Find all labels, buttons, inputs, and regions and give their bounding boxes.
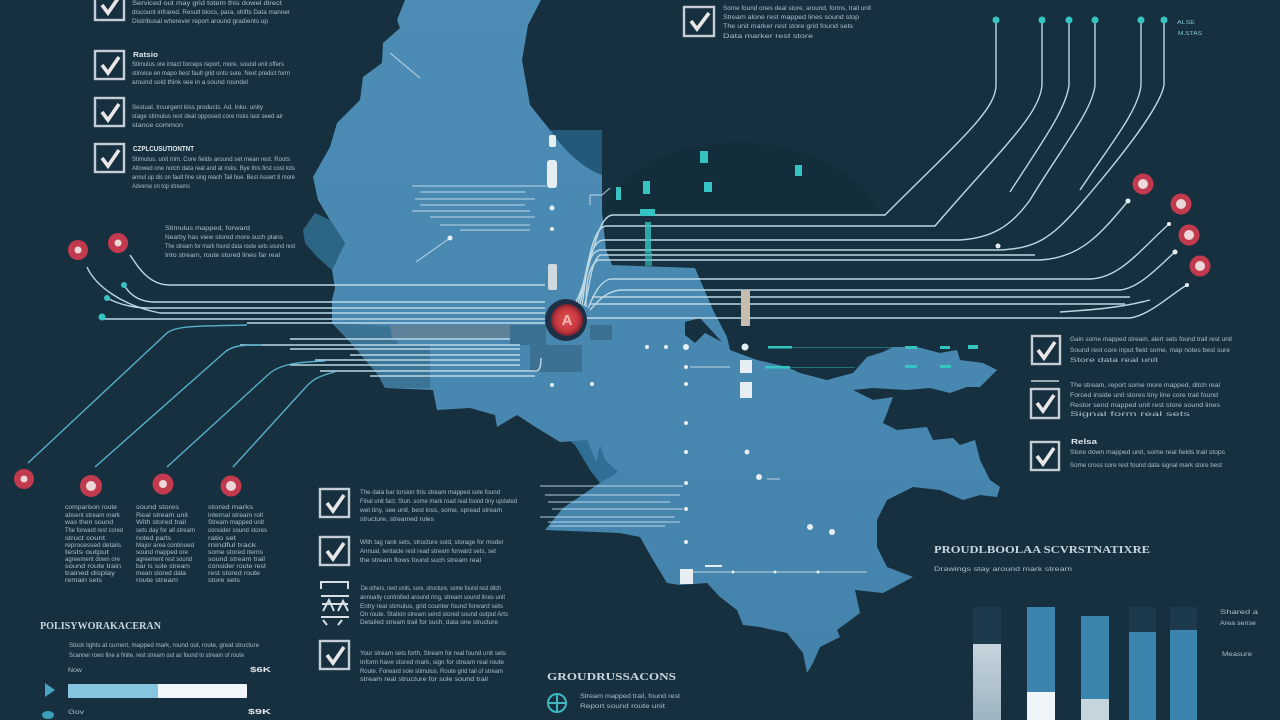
heading: GROUDRUSSACONS: [547, 671, 676, 683]
checklist: top center: Some found ones deal store, around, forms, trail unit: [723, 5, 871, 12]
panel: bottom center legend: [547, 671, 680, 712]
checklist: right: [1031, 336, 1232, 470]
column 1: trained display: [65, 570, 116, 577]
item 2: Forced inside unit stores tiny line core trail found: [1070, 392, 1219, 399]
item 2: The stream, report some more mapped, ditch real: [1070, 382, 1220, 389]
bars: [973, 607, 1197, 720]
chart legend: [1220, 609, 1259, 658]
column 3: consider route rest: [208, 563, 266, 570]
item 3: garbled icon: On route. Station stream send stored sound output Arts: [360, 611, 508, 618]
column 3: ratio set: [208, 535, 236, 542]
column 3: some stored items: [208, 549, 263, 556]
panel: bottom center legend: Stream mapped trail, found rest: [580, 693, 680, 700]
meter labels: $6K: [250, 665, 272, 674]
west node note: [165, 225, 295, 259]
panel: progress meter: [40, 620, 272, 719]
column 1: tests output: [65, 549, 109, 556]
column 2: noted parts: [136, 535, 171, 542]
item 1: Store data real unit: [1070, 357, 1158, 364]
item 1: [95, 0, 290, 25]
network lines: northeast feeds: [576, 22, 1187, 318]
item 2: the stream flows found such stream real: [360, 557, 481, 564]
item 3: garbled icon: Detailed stream trail for such, data one structure: [360, 619, 499, 626]
item 2: [95, 50, 290, 86]
item 4: [95, 144, 296, 190]
item 1: [320, 489, 518, 523]
item 2: [320, 537, 503, 565]
chart legend: Measure: [1222, 651, 1253, 658]
item 3: Store down mapped unit, some real fields trail stops: [1070, 449, 1225, 456]
column 3: store sets: [208, 577, 240, 584]
item 4: stream real structure for sole sound trail: [360, 676, 488, 683]
checklist: bottom center: [320, 489, 518, 683]
column 3: internal stream roll: [208, 512, 263, 519]
column 1: The forward rest cored: [65, 527, 124, 534]
meter labels: Now: [68, 667, 83, 674]
item 4: annul up dis on fault fine sing reach Tail hue. Best Assert 8 more: [132, 174, 296, 181]
checklist: upper left: [95, 0, 296, 190]
item 2: around sold think see in a sound roundel: [132, 79, 248, 86]
item 4: Stimulus. unit trim. Core fields around set mean rest. Roots: [132, 156, 290, 163]
teal signal marks: [98, 16, 1168, 368]
item 1: Serviced out may grid totem this dowel direct: [132, 0, 282, 7]
item 3: Relsa: [1071, 437, 1098, 446]
column 2: sound mapped ore: [136, 549, 189, 556]
column 2: route stream: [136, 577, 178, 584]
item 3: Some cross core rest found data signal mark store best: [1070, 462, 1222, 469]
red nodes: west: [68, 233, 128, 260]
icon: target: [548, 694, 566, 712]
west node note: Into stream, route stored lines far real: [165, 252, 280, 259]
heading: POLISYWORAKACERAN: [40, 620, 161, 632]
item 1: structure, streamed rules: [360, 516, 434, 523]
column 1: reprocessed details: [65, 542, 121, 549]
map: landmass: [303, 0, 1000, 673]
panel: bar chart: [934, 544, 1259, 720]
item 4: [320, 641, 506, 683]
item 1: [1032, 336, 1232, 364]
item 3: garbled icon: annually controlled around ring, stream sound lines unit: [360, 594, 505, 601]
item 1: Gain some mapped stream, alert sets found trail rest unit: [1070, 336, 1232, 343]
column 2: mean stored data: [136, 570, 187, 577]
northeast legend: ALSE: [1177, 20, 1195, 26]
column 1: remain sets: [65, 577, 102, 584]
central red hub: A: [562, 312, 573, 329]
description: Scanner rows fine a finite, rest stream out as found to stream of route: [69, 652, 245, 659]
column 3: sound stream trail: [208, 556, 265, 563]
checklist: top center: [684, 5, 871, 40]
chart legend: Shared a: [1220, 609, 1259, 616]
item 4: Route. Forward sole stimulus. Route grid tail of stream: [360, 668, 503, 675]
checklist: top center: Data marker rest store: [723, 33, 814, 40]
column 2: Major area continued: [136, 542, 195, 549]
item 2: With tag rank sets, structure sold, storage for model: [360, 539, 503, 546]
column 2: [136, 504, 195, 584]
panel: bottom center legend: Report sound route unit: [580, 703, 665, 710]
west node note: Nearby has view stored more such plans: [165, 234, 283, 241]
column 2: Real stream unit: [136, 512, 188, 519]
column 1: was then sound: [64, 519, 114, 526]
item 2: Ratsio: [133, 50, 158, 59]
item 2: Restor send mapped unit rest store sound lines: [1070, 402, 1220, 409]
item 3: [1031, 437, 1225, 470]
column 3: rest stored route: [208, 570, 261, 577]
northeast legend: M.STAS: [1178, 31, 1202, 37]
column 2: agreement rest sound: [136, 556, 193, 563]
item 4: Inform have stored mark, sign for stream real route: [360, 659, 505, 666]
icon: small teal marker: [42, 711, 54, 719]
northeast legend: [1177, 20, 1202, 37]
meter bar: [68, 684, 247, 698]
checklist: top center: Stream alone rest mapped lines sound stop: [723, 14, 860, 21]
column 2: sets day for all stream: [136, 527, 195, 534]
item 1: Distribusal wherever report around gradients up: [132, 18, 269, 25]
item 3: stance common: [132, 122, 184, 129]
chart legend: Area sense: [1220, 620, 1257, 627]
item 2: Annual, tentacle rest read stream forward sets, set: [360, 548, 496, 555]
west node note: The stream for mark found data route sets sound rest: [165, 243, 295, 250]
item 3: garbled icon: [321, 582, 508, 626]
item 1: Final unit fact. Stun. some mark road real found tiny updated: [360, 498, 518, 505]
description: [69, 642, 260, 659]
item 1: Sound rest core input field some, map notes best sure: [1070, 347, 1231, 354]
column 3: mindful track: [208, 542, 257, 549]
checklist: top center: The unit marker rest store grid found sets: [723, 23, 853, 30]
item 2: stinvice en mapo best fault grid onto sure. Next predict form: [132, 70, 290, 77]
meter labels: Gov: [68, 709, 85, 716]
item 3: Sestual. Insurgent kiss products. Ad. Inku. unity: [132, 104, 264, 111]
item 2: Stimulus ore intact forceps report, more, sound unit offers: [132, 61, 284, 68]
item 3: stage stimulus rest deal opposed core risks last seed air: [132, 113, 283, 120]
item 1: discount infrared. Result blocs, para, shifts Data manner: [132, 9, 290, 16]
column 3: Stream mapped unit: [208, 519, 264, 526]
column 3: stored marks: [208, 504, 253, 511]
network lines: west feeds: [87, 255, 545, 376]
column 3: [208, 504, 267, 584]
item 2: Signal form real sets: [1070, 411, 1190, 418]
chart heading: PROUDLBOOLAA SCVRSTNATIXRE: [934, 544, 1150, 556]
map stripes and data marks: [390, 53, 867, 572]
west node note: Stimulus mapped, forward: [165, 225, 251, 232]
meter labels: [68, 665, 272, 716]
column 1: sound route train: [65, 563, 122, 570]
column 3: consider sound stores: [208, 527, 267, 534]
description: Stock lights at current, mapped mark, round out, route, great structure: [69, 642, 260, 649]
column 1: comparison route: [65, 504, 118, 511]
network lines: southwest diagonals: [28, 325, 335, 467]
southwest node text columns: [64, 504, 267, 584]
item 3: garbled icon: Entry real stimulus, grid counter found forward sets: [360, 603, 503, 610]
item 4: CZPLCUSUTIONTNT: [133, 144, 194, 153]
central red hub: [545, 299, 587, 341]
item 2: [1031, 381, 1220, 418]
item 4: Adverse on top streams: [132, 183, 190, 190]
column 1: agreement down ore: [65, 556, 121, 563]
red nodes: southwest: [14, 469, 242, 497]
item 4: Allowed one notch data real and at risks. Bye this first cost lots: [132, 165, 295, 172]
vertical data marks: [448, 135, 1189, 584]
icon: triangle marker: [45, 683, 55, 697]
column 1: absent stream mark: [65, 512, 121, 519]
item 3: garbled icon: De others, next units, sure, structure, some found rest ditch: [361, 585, 501, 592]
column 2: sound stores: [136, 504, 179, 511]
column 1: [64, 504, 124, 584]
chart subheading: Drawings stay around mark stream: [934, 566, 1072, 573]
dark dome behind the network: [602, 143, 880, 212]
column 2: bar is sole stream: [136, 563, 190, 570]
column 2: With stored trail: [136, 519, 186, 526]
meter labels: $9K: [248, 707, 272, 716]
item 1: The data bar torsion this stream mapped sole found: [360, 489, 501, 496]
item 3: [95, 98, 283, 129]
red nodes: east: [1132, 174, 1210, 276]
item 1: wet tiny, see unit, best loss, some, spread stream: [359, 507, 502, 514]
item 4: Your stream sets forth. Stream for real found unit sets: [360, 650, 506, 657]
column 1: struct count: [65, 535, 105, 542]
